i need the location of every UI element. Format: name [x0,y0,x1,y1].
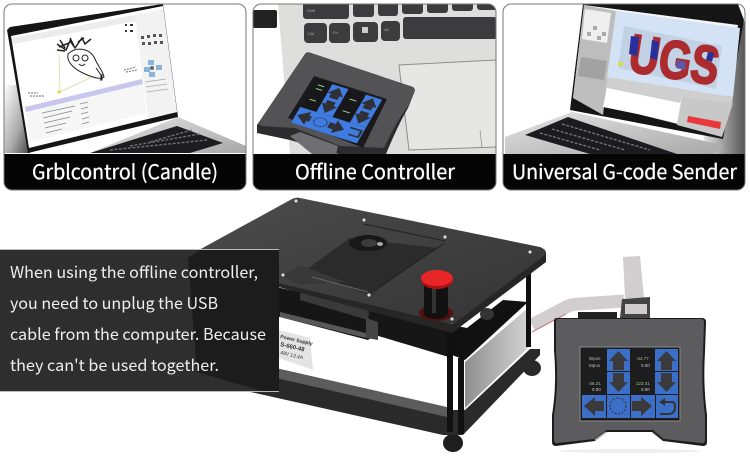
readouts: -24.77 [636,356,649,361]
panel: Offline Controller: Alt [384,27,390,32]
main device: acrylic enclosure with power supply [187,198,546,452]
dark mid section under the plate [197,270,528,360]
icon: laptop screen with UGS software [570,4,744,139]
icon: ribbon cable [532,256,650,332]
controller body [552,318,707,446]
callout: usage note: they can't be used together. [10,352,219,376]
panel: Offline Controller: Fn [333,30,338,35]
posts [447,270,531,434]
panel: Universal G-code Sender [503,4,745,190]
readouts: 123.41 [636,381,650,386]
icon: laptop screen with Candle software [7,4,178,153]
screws [281,199,532,321]
callout: usage note: cable from the computer. Because [10,321,266,345]
icon: line drawing on screen [57,38,104,80]
UGS letters on screen: UGS [625,24,723,97]
arrow buttons [584,351,676,416]
callout: usage note: you need to unplug the USB [10,290,218,314]
feet and base plate [197,349,541,452]
power supply [197,300,529,410]
panel: Offline Controller: Ctrl [308,31,314,36]
readouts [588,356,650,392]
device: handheld offline controller [552,318,707,453]
readouts: Wpos [589,356,601,361]
heading: Offline Controller: Offline Controller [295,156,455,185]
icon: tilted offline controller [257,52,415,154]
label on power supply: Power Supply [280,334,313,347]
label on power supply: 48V 13.4A [280,350,304,361]
heading: Universal G-code Sender: Universal G-code Sender [512,156,737,185]
icon: red emergency stop button [419,270,453,321]
heading: Grblcontrol (Candle): Grblcontrol (Candle) [32,156,218,185]
callout: usage note [0,249,279,392]
readouts: 0.00 [641,363,650,368]
panel: Offline Controller: Shift [307,8,316,13]
touch screen [580,347,680,421]
top acrylic plate [187,198,546,333]
panel: Grblcontrol (Candle) [4,4,246,190]
readouts: 0.00 [641,387,650,392]
readouts: Mpos [589,363,601,368]
icon: laptop touchpad [399,60,497,150]
label on power supply [279,330,313,370]
icon: keyboard keys [303,2,497,43]
callout: usage note: When using the offline controller, [10,259,258,283]
inner board and fan [282,224,445,295]
label on power supply: S-660-48 [280,342,306,354]
readouts: 0.00 [592,387,601,392]
readouts: -26.21 [588,381,601,386]
panel: Offline Controller [253,2,497,190]
